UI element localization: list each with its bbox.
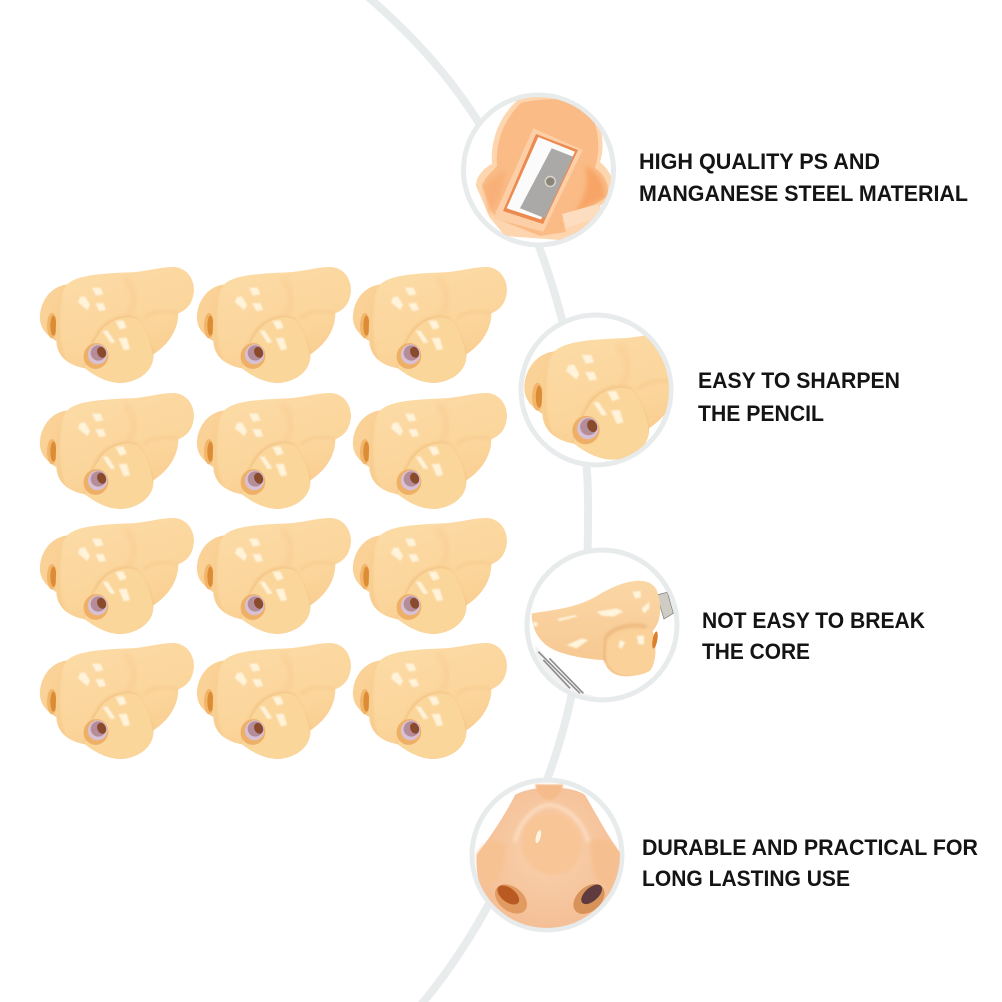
nose row 4 col 1: [40, 643, 194, 759]
callout 4: front view circle: [472, 780, 622, 930]
connecting curved line: [367, 0, 588, 1002]
blade screw: [545, 176, 555, 186]
feature text 1: [639, 149, 968, 206]
feature text 4: DURABLE AND PRACTICAL FOR: [642, 835, 978, 860]
feature text 4: LONG LASTING USE: [642, 866, 850, 891]
feature text 3: THE CORE: [702, 639, 810, 664]
nose row 1 col 1: [40, 267, 194, 383]
nose row 1 col 3: [353, 267, 507, 383]
nose row 2 col 3: [353, 393, 507, 509]
nose row 2 col 2: [197, 393, 351, 509]
steel blade: [520, 148, 573, 218]
feature text 1: HIGH QUALITY PS AND: [639, 149, 880, 174]
feature text 3: [702, 608, 926, 664]
sharpener housing: [493, 128, 583, 232]
feature text 4: [642, 835, 978, 891]
orange interior: [476, 96, 614, 240]
nose row 2 col 1: [40, 393, 194, 509]
nose row 1 col 2: [197, 267, 351, 383]
nose row 4 col 2: [197, 643, 351, 759]
nose row 4 col 3: [353, 643, 507, 759]
feature text 1: MANGANESE STEEL MATERIAL: [639, 181, 968, 206]
callout 3: side view circle: [527, 550, 677, 700]
product grid: twelve nose sharpeners: [40, 267, 507, 759]
nose row 3 col 2: [197, 518, 351, 634]
callout 2: pencil hole circle: [521, 315, 694, 465]
nose row 3 col 3: [353, 518, 507, 634]
callout 1: sharpener blade circle: [464, 95, 614, 245]
nose row 3 col 1: [40, 518, 194, 634]
feature text 2: [698, 368, 900, 426]
feature text 2: EASY TO SHARPEN: [698, 368, 900, 393]
feature text 3: NOT EASY TO BREAK: [702, 608, 926, 633]
feature text 2: THE PENCIL: [698, 401, 824, 426]
